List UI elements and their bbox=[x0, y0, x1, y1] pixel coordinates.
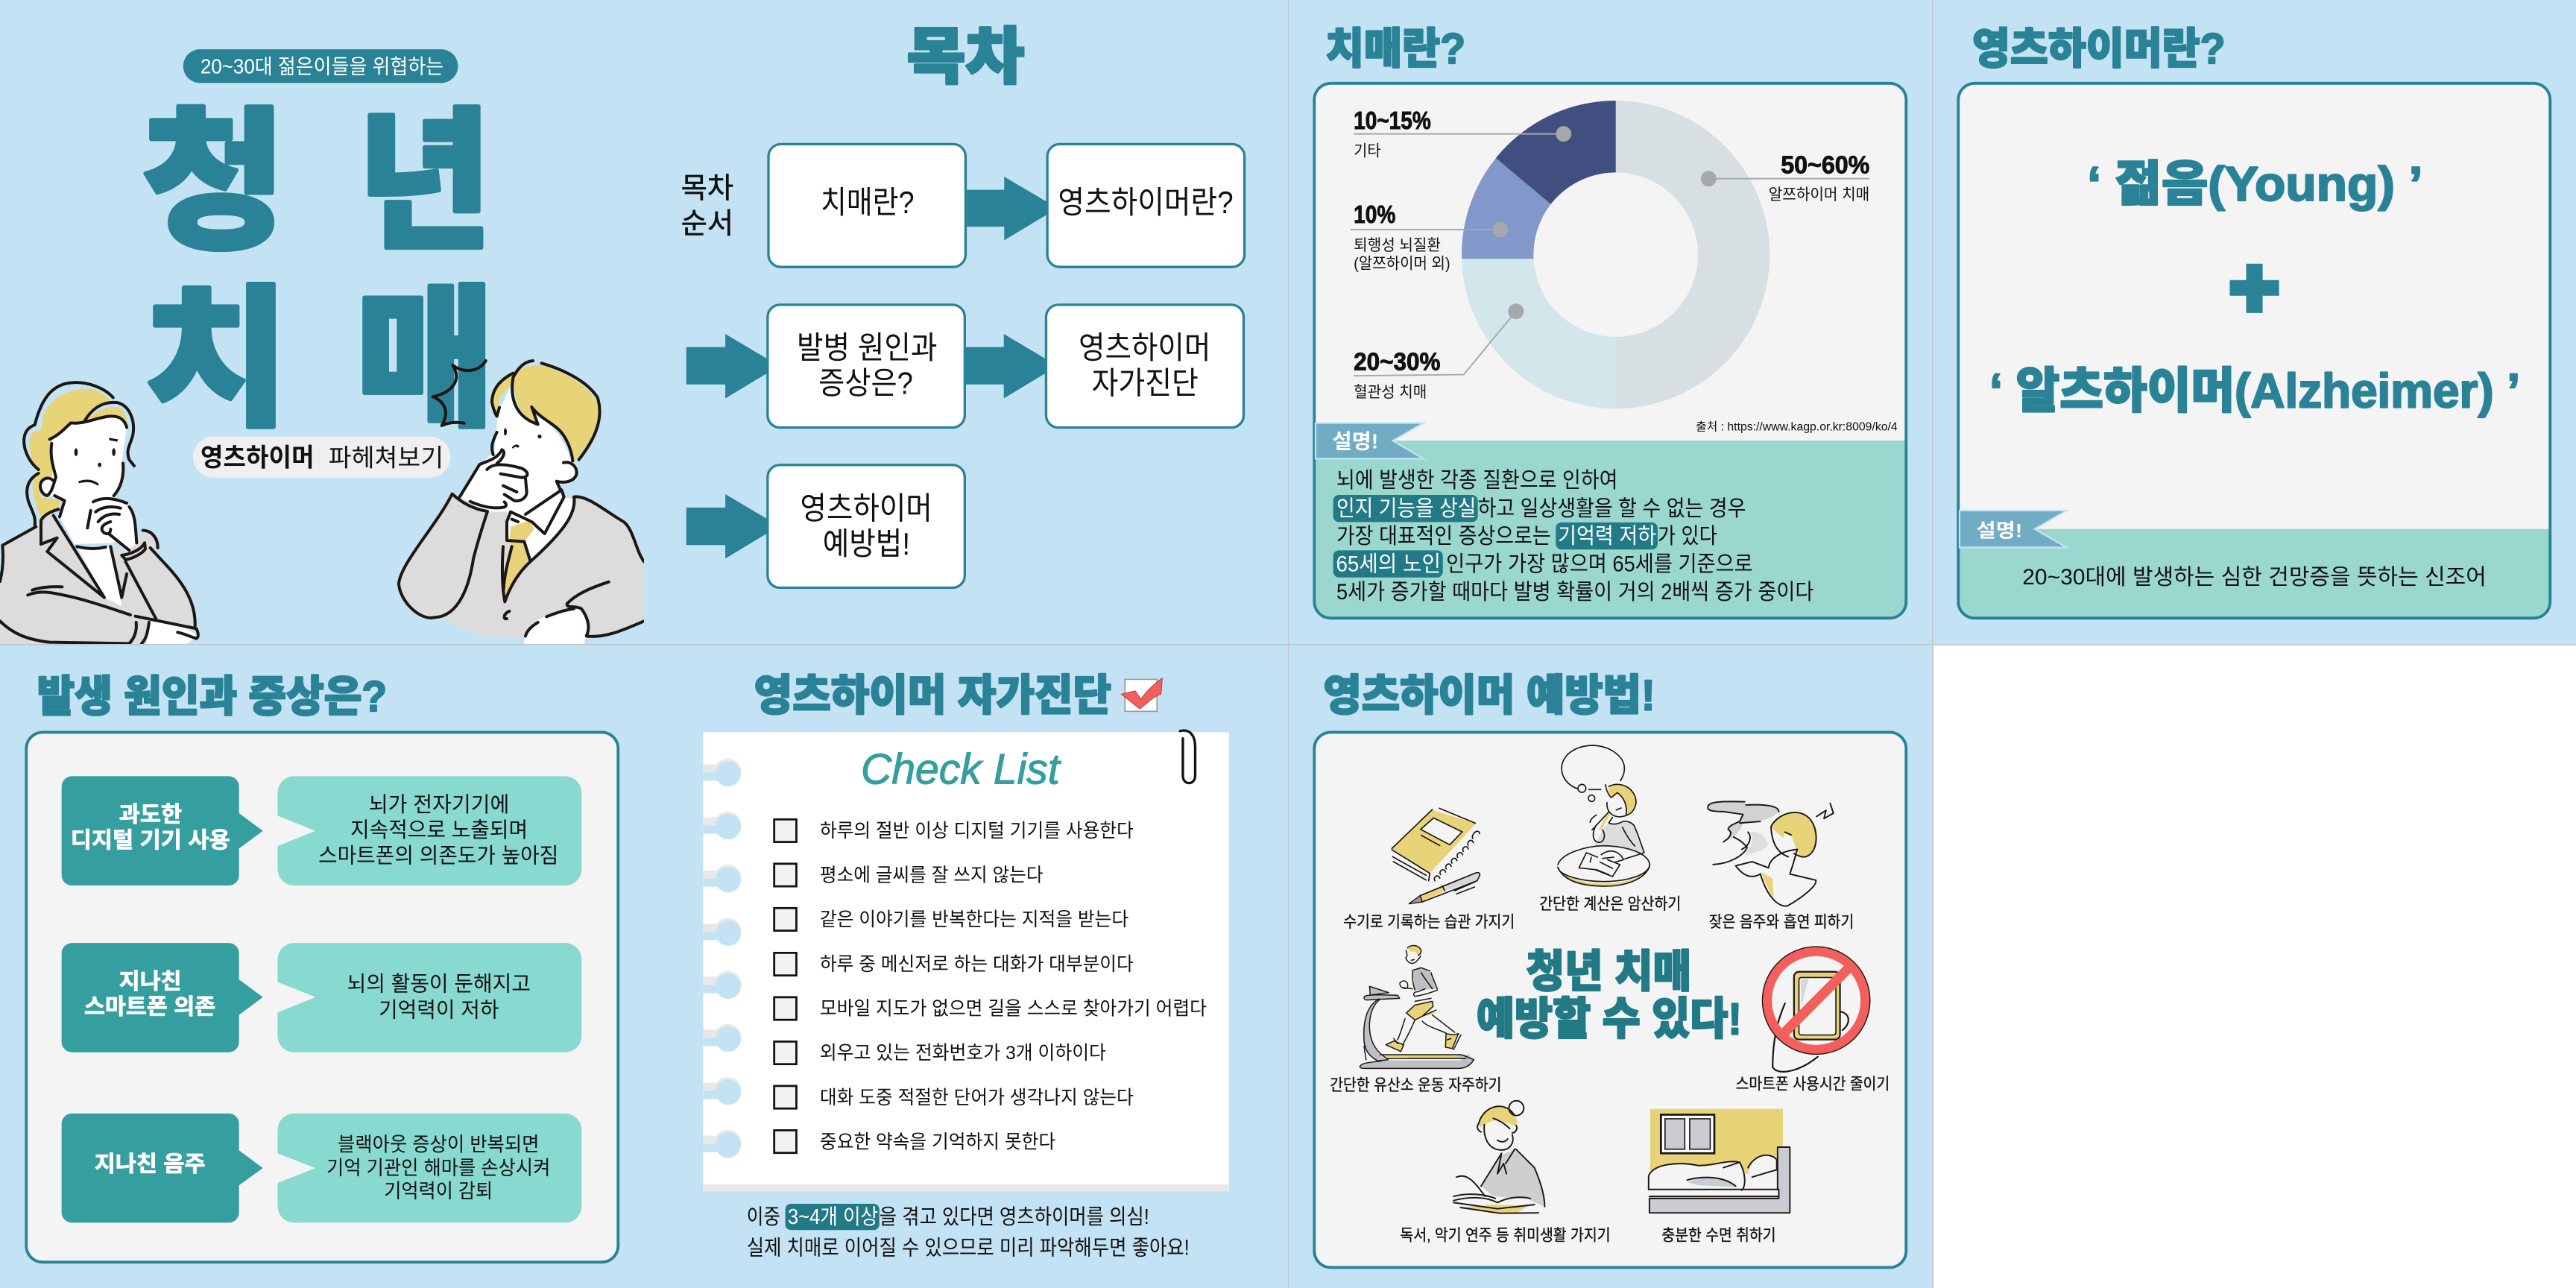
prevention labels: 잦은 음주와 흡연 피하기 bbox=[1709, 913, 1854, 931]
formula: alzheimer: ‘ 알츠하이머(Alzheimer) ’ bbox=[1989, 364, 2520, 418]
explanation text bbox=[1333, 468, 1813, 604]
cover title: 치 bbox=[145, 275, 289, 446]
center slogan bbox=[1477, 947, 1742, 1044]
card background bbox=[26, 732, 618, 1262]
donut chart bbox=[1462, 101, 1770, 408]
closing note: 을 겪고 있다면 영츠하이머를 의심! bbox=[880, 1205, 1149, 1229]
toc arrow 4 bbox=[686, 494, 779, 558]
ribbon label bbox=[1316, 423, 1424, 458]
cause row 1: 지속적으로 노출되며 bbox=[350, 818, 528, 842]
toc box: what is youngzheimer bbox=[1047, 144, 1245, 267]
checklist items bbox=[774, 819, 1207, 1153]
explanation text: 20~30대에 발생하는 심한 건망증을 뜻하는 신조어 bbox=[2022, 565, 2487, 590]
toc arrow 3 bbox=[965, 334, 1058, 398]
toc title: 목차 bbox=[907, 22, 1024, 92]
label: other 10-15% bbox=[1354, 107, 1431, 160]
icon: notebook and pen bbox=[1392, 808, 1480, 904]
ribbon label bbox=[1960, 511, 2067, 548]
prevention labels: 독서, 악기 연주 등 취미생활 가지기 bbox=[1400, 1227, 1611, 1245]
checklist items: 대화 도중 적절한 단어가 생각나지 않는다 bbox=[820, 1087, 1134, 1108]
toc arrow 2 bbox=[686, 334, 779, 398]
prevention labels: 간단한 계산은 암산하기 bbox=[1539, 895, 1681, 913]
checklist items: 외우고 있는 전화번호가 3개 이하이다 bbox=[820, 1043, 1106, 1064]
panel: table of contents bbox=[644, 0, 1288, 644]
cause row 3: 기억력이 감퇴 bbox=[384, 1180, 493, 1202]
panel: what is dementia bbox=[1288, 0, 1932, 644]
source note: 출처 : https://www.kagp.or.kr:8009/ko/4 bbox=[1696, 420, 1898, 433]
cause row 1: 과도한 bbox=[119, 803, 182, 827]
cause row 3: 블랙아웃 증상이 반복되면 bbox=[338, 1134, 539, 1156]
label: vascular 20-30% bbox=[1354, 348, 1440, 401]
prevention labels: 스마트폰 사용시간 줄이기 bbox=[1736, 1075, 1890, 1093]
checklist items: 같은 이야기를 반복한다는 지적을 받는다 bbox=[820, 909, 1128, 930]
toc side label: 순서 bbox=[681, 208, 733, 240]
center slogan: 예방할 수 있다! bbox=[1477, 994, 1742, 1044]
label: degenerative 10% bbox=[1354, 201, 1450, 272]
panel heading: 치매란? bbox=[1326, 25, 1465, 73]
cause row 3: 기억 기관인 해마를 손상시켜 bbox=[326, 1157, 550, 1179]
label: other 10-15%: 10~15% bbox=[1354, 107, 1431, 135]
leader lines and dots bbox=[1351, 126, 1869, 376]
cause row 2: 지나친 bbox=[119, 969, 182, 994]
cause row 3 bbox=[62, 1114, 581, 1222]
cause row 1 bbox=[62, 776, 581, 886]
cause row 2 bbox=[62, 943, 581, 1052]
explanation text: 인지 기능을 상실 bbox=[1336, 496, 1476, 521]
icon: paperclip bbox=[1180, 730, 1195, 783]
toc box: causes and symptoms bbox=[768, 305, 965, 428]
cause row 2: 스마트폰 의존 bbox=[84, 994, 215, 1019]
panel: self diagnosis bbox=[644, 644, 1288, 1288]
toc box: prevention bbox=[768, 465, 965, 588]
center slogan: 청년 치매 bbox=[1527, 947, 1691, 997]
panel heading: 발생 원인과 증상은? bbox=[37, 673, 387, 721]
toc box: causes and symptoms: 발병 원인과 bbox=[797, 330, 937, 365]
ribbon label: 설명! bbox=[1977, 521, 2022, 542]
toc box: self diagnosis: 영츠하이머 bbox=[1079, 330, 1210, 365]
cause row 1: 스마트폰의 의존도가 높아짐 bbox=[318, 845, 558, 868]
toc box: what is dementia bbox=[768, 144, 965, 267]
cause row 1: 디지털 기기 사용 bbox=[71, 828, 230, 853]
explanation text: 가장 대표적인 증상으로는 bbox=[1336, 524, 1551, 549]
explanation text: 5세가 증가할 때마다 발병 확률이 거의 2배씩 증가 중이다 bbox=[1336, 580, 1813, 604]
label: alzheimer 50-60% bbox=[1769, 152, 1869, 203]
empty panel edge lines bbox=[1932, 644, 2576, 1288]
check list title: Check List bbox=[861, 745, 1061, 793]
toc box: prevention: 영츠하이머 bbox=[800, 490, 932, 525]
label: vascular 20-30%: 20~30% bbox=[1354, 348, 1440, 376]
icon: red check box bbox=[1121, 678, 1162, 711]
panel: what is youngzheimer bbox=[1932, 0, 2576, 644]
panel: prevention bbox=[1288, 644, 1932, 1288]
panel: cover bbox=[0, 0, 644, 644]
toc box: what is dementia: 치매란? bbox=[821, 185, 915, 220]
icon group: notebook and mental math bbox=[1392, 745, 1650, 904]
explanation text: 가 있다 bbox=[1658, 524, 1717, 549]
ribbon label: 설명! bbox=[1333, 430, 1378, 453]
card background bbox=[1314, 732, 1906, 1267]
checklist items: 하루 중 메신저로 하는 대화가 대부분이다 bbox=[820, 954, 1134, 975]
toc box: self diagnosis bbox=[1046, 305, 1243, 428]
explanation text: 기억력 저하 bbox=[1558, 524, 1656, 549]
toc box: prevention: 예방법! bbox=[823, 526, 910, 561]
label: other 10-15%: 기타 bbox=[1354, 142, 1381, 160]
explanation text: 인구가 가장 많으며 65세를 기준으로 bbox=[1446, 552, 1753, 576]
cover subtitle pill: 20~30대 젊은이들을 위협하는 bbox=[201, 55, 443, 78]
closing note: 이중 bbox=[747, 1205, 780, 1229]
icon group: treadmill runner bbox=[1360, 945, 1474, 1068]
panel heading: 영츠하이머란? bbox=[1972, 25, 2225, 73]
cover subtitle pill bbox=[183, 49, 458, 83]
toc box: what is youngzheimer: 영츠하이머란? bbox=[1058, 185, 1234, 220]
cause row 3: 지나친 음주 bbox=[95, 1152, 206, 1177]
illustration: thinking woman bbox=[0, 382, 198, 644]
checklist items: 모바일 지도가 없으면 길을 스스로 찾아가기 어렵다 bbox=[820, 999, 1207, 1020]
cause row 2: 기억력이 저하 bbox=[379, 998, 499, 1022]
closing note: 3~4개 이상 bbox=[788, 1205, 878, 1229]
cover title: 년 bbox=[357, 98, 492, 268]
closing note: 실제 치매로 이어질 수 있으므로 미리 파악해두면 좋아요! bbox=[747, 1236, 1190, 1260]
cause row 1: 뇌가 전자기기에 bbox=[369, 793, 509, 817]
card background bbox=[1958, 83, 2550, 618]
panel heading: 영츠하이머 자가진단 bbox=[754, 672, 1111, 720]
icon: reading person bbox=[1453, 1101, 1544, 1213]
prevention labels: 수기로 기록하는 습관 가지기 bbox=[1343, 913, 1515, 931]
checklist items: 하루의 절반 이상 디지털 기기를 사용한다 bbox=[820, 821, 1134, 842]
cover title: 매 bbox=[356, 275, 494, 446]
cover sub-heading pill: 영츠하이머 bbox=[201, 443, 315, 472]
cover sub-heading pill: 파헤쳐보기 bbox=[329, 444, 443, 472]
label: degenerative 10%: 10% bbox=[1354, 201, 1395, 229]
toc arrow 1 bbox=[967, 177, 1058, 240]
cover title: 청 bbox=[142, 98, 286, 268]
label: alzheimer 50-60%: 50~60% bbox=[1781, 152, 1869, 180]
panel: causes and symptoms bbox=[0, 644, 644, 1288]
explanation text: 뇌에 발생한 각종 질환으로 인하여 bbox=[1336, 468, 1617, 493]
notepad ring holes bbox=[703, 759, 742, 1158]
panel heading: 영츠하이머 예방법! bbox=[1323, 672, 1655, 720]
label: degenerative 10%: (알쯔하이머 외) bbox=[1354, 255, 1450, 272]
explanation text: 하고 일상생활을 할 수 없는 경우 bbox=[1478, 496, 1746, 521]
card background bbox=[1314, 83, 1906, 618]
explanation text: 65세의 노인 bbox=[1336, 552, 1441, 576]
formula: young: ‘ 젊음(Young) ’ bbox=[2087, 157, 2422, 211]
icon: no smartphone bbox=[1762, 947, 1870, 1072]
cover sub-heading pill bbox=[193, 437, 450, 478]
formula: plus sign bbox=[2229, 264, 2279, 313]
prevention labels: 간단한 유산소 운동 자주하기 bbox=[1330, 1076, 1502, 1094]
checklist items: 중요한 약속을 기억하지 못한다 bbox=[820, 1132, 1055, 1153]
toc box: self diagnosis: 자가진단 bbox=[1092, 365, 1199, 400]
label: alzheimer 50-60%: 알쯔하이머 치매 bbox=[1769, 186, 1869, 203]
icon: sleeping person bbox=[1649, 1109, 1790, 1213]
toc side label bbox=[681, 173, 733, 240]
icon: avoiding smoke person bbox=[1708, 801, 1834, 906]
icon: mental math person bbox=[1558, 745, 1650, 886]
prevention labels: 충분한 수면 취하기 bbox=[1661, 1227, 1776, 1245]
label: degenerative 10%: 퇴행성 뇌질환 bbox=[1354, 237, 1441, 254]
checklist items: 평소에 글씨를 잘 쓰지 않는다 bbox=[820, 865, 1044, 886]
cover title bbox=[142, 98, 494, 446]
toc box: causes and symptoms: 증상은? bbox=[818, 365, 913, 400]
toc side label: 목차 bbox=[681, 173, 733, 205]
label: vascular 20-30%: 혈관성 치매 bbox=[1354, 384, 1427, 401]
illustration: surprised man bbox=[399, 361, 644, 644]
cause row 2: 뇌의 활동이 둔해지고 bbox=[347, 973, 531, 997]
prevention labels bbox=[1330, 895, 1890, 1245]
notepad sheet bbox=[703, 732, 1229, 1192]
closing note bbox=[747, 1204, 1190, 1260]
